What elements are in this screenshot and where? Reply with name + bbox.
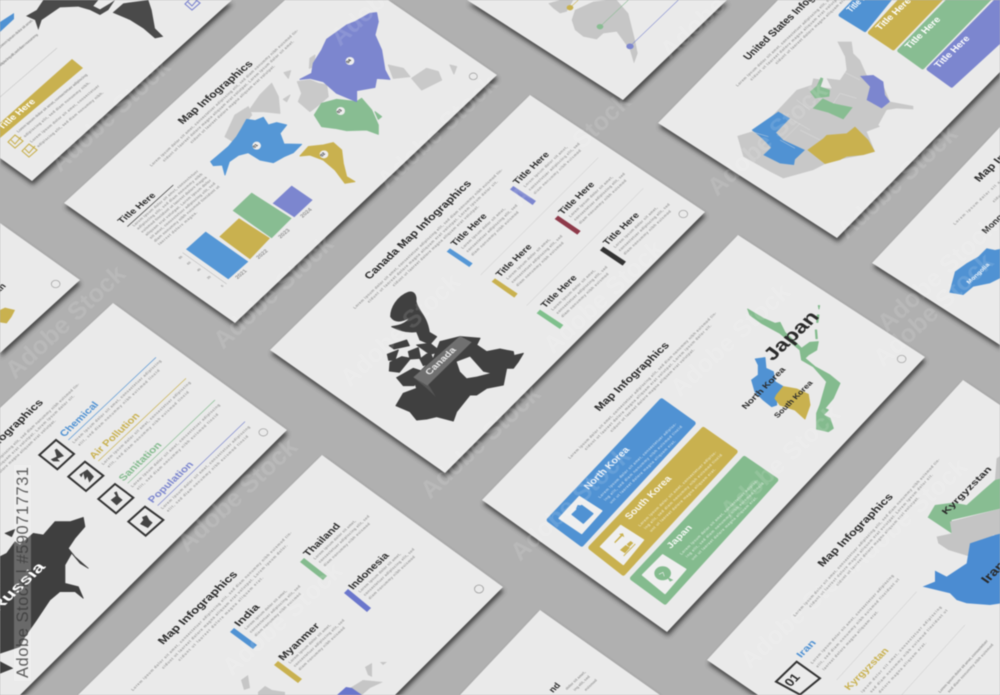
item: Indonesia: Indonesia (346, 551, 392, 592)
bar chart: 2023 (277, 228, 292, 240)
item: blue: consectetuer adipiscing elit, sed (465, 203, 519, 253)
card: yellow (870, 0, 945, 48)
map: Mongolia: Mongolia (966, 262, 992, 285)
item: Population: Lorem ipsum dolor sit amet, consectetuer adipiscing (160, 425, 252, 510)
watermarks: Adobe Stock (868, 248, 999, 372)
subtitle text: cidunt ut laoreet dolore magna aliquam erat volutpat. (392, 205, 480, 287)
icon: factory (68, 462, 103, 491)
panel: Iran and Kyrgyzstan slide (707, 380, 1000, 695)
card: South Korea: ing elit, sed diam nonummy nibh euismod tincid (643, 453, 724, 530)
card: South Korea (591, 429, 735, 573)
title: Canada Map Infographics (362, 178, 475, 282)
item: green: Lorem ipsum dolor sit amet, (550, 269, 596, 311)
subtitle text: cidunt ut laoreet dolore magna aliquam erat volutpat. (189, 65, 276, 144)
text block: sed diam nonummy nibh euismod (947, 643, 995, 693)
item: Iran: Lorem ipsum dolor sit amet, consectetuer adipiscing (810, 574, 895, 665)
card: North Korea: Lorem ipsum dolor sit amet, consectetuer adipisc- (598, 422, 678, 499)
item: Air Pollution: Air Pollution (87, 411, 143, 461)
item: yellow: Title Here (493, 242, 534, 278)
bar chart: 0 (220, 284, 225, 288)
text fragment: euismod (584, 678, 599, 692)
map: USA base (737, 42, 913, 178)
card: blue (841, 0, 893, 30)
markers (567, 5, 634, 49)
item: Myanmar (274, 608, 351, 683)
banner: yellow title (0, 59, 83, 138)
watermarks: Adobe Stock (665, 278, 796, 402)
text fragment: ing elit, sed (573, 675, 592, 692)
icon: lightbulb (654, 566, 673, 582)
stock ID strip: Adobe Stock | #590717731 (14, 467, 32, 678)
item: yellow: Lorem ipsum dolor sit amet, (505, 238, 551, 280)
panel: left small slide (0, 223, 80, 353)
item: green: consectetuer adipiscing elit, sed (555, 265, 609, 315)
map: purple states (860, 75, 890, 108)
map: Russia (0, 517, 88, 673)
map: Japan (748, 306, 840, 432)
item: Sanitation: Sanitation (117, 441, 165, 483)
banner: blue (0, 13, 14, 32)
item: black: diam nonummy nibh euismod (623, 209, 673, 255)
card: South Korea: South Korea (623, 474, 675, 522)
map: Kyrgyzstan (928, 473, 1000, 533)
item: purple: Lorem ipsum dolor sit amet, (523, 146, 569, 188)
watermarks: Adobe Stock (735, 550, 866, 674)
item: Thailand: Thailand (301, 522, 343, 559)
watermarks: Adobe Stock (702, 77, 833, 201)
icon: growth chart (614, 533, 636, 556)
heading: title here: Title Here (115, 191, 158, 225)
text fragment: dolor sit amet, (565, 671, 587, 691)
map fragment (0, 308, 15, 323)
map: green states (810, 77, 853, 119)
item: India (230, 574, 307, 649)
item: India: Lorem ipsum dolor sit amet, (244, 590, 288, 630)
watermarks: Adobe Stock (372, 70, 503, 194)
card: green: Title Here (903, 15, 943, 50)
subtitle text: Lorem ipsum dolor sit amet, consectetuer adipiscing elit, sed diam nonummy nibh euismod tin- (568, 311, 718, 460)
item: Thailand: consectetuer adipiscing elit, sed (318, 514, 371, 564)
watermarks: Adobe Stock (335, 268, 466, 392)
map: gray Africa (548, 0, 638, 63)
item: Myanmar: diam nonummy nibh euismod (298, 626, 347, 671)
text block: aliquam erat volutpat. Lorem ipsum dolor (144, 179, 213, 237)
card: Japan: Lorem ipsum dolor sit amet, consectetuer adipisc- (679, 479, 760, 556)
item: Myanmar: Lorem ipsum dolor sit amet, (288, 624, 332, 664)
icon: page badge (474, 585, 484, 593)
item: yellow (492, 224, 569, 298)
panel: United States slide (658, 0, 1000, 238)
icon: page badge (469, 73, 477, 80)
item: Thailand: diam nonummy nibh euismod (323, 522, 372, 567)
item: India: India (232, 602, 263, 629)
subtitle text: cidunt ut laoreet dolore magna aliquam erat. (176, 576, 264, 662)
map markers: 02 (319, 151, 327, 158)
bar chart: 2021 (234, 269, 249, 280)
subtitle text: Lorem ipsum dolor sit amet, consectetuer adipiscing elit, sed diam nonummy nibh euismod tin- (149, 28, 300, 167)
map: blue states (752, 112, 805, 165)
text block: Lorem ipsum dolor sit amet, consectetuer adipiscing (16, 73, 89, 133)
map markers: 03 (335, 108, 343, 114)
item: Thailand (300, 504, 376, 580)
bar chart: 2024 (299, 207, 314, 219)
map: South Korea (775, 387, 810, 419)
leader lines (570, 0, 678, 46)
text block: diam nonummy nibh euismod tincidunt ut (153, 185, 221, 243)
map markers: 04 (345, 58, 353, 64)
icon: page badge (259, 429, 268, 436)
map: yellow states (807, 127, 875, 164)
card: green (899, 0, 993, 67)
watermarks: Adobe Stock (715, 400, 846, 524)
subtitle text: Lorem ipsum dolor sit amet, consectetuer adipiscing elit, sed diam nonummy nibh euismod tin- (130, 530, 293, 692)
text block: euismod tincidunt ut laoreet dolore magna (140, 175, 209, 233)
map: North Korea (752, 358, 783, 407)
card: North Korea: ing elit, sed diam nonummy nibh euismod tincid (603, 425, 684, 502)
icon: sanitizer (98, 484, 133, 513)
subtitle text: cidunt ut laoreet dolore magna aliquam erat volutpat. Lorem ipsum dolor sit amet. (162, 40, 295, 162)
item: blue: Title Here (448, 212, 489, 248)
subtitle text: cidunt ut laoreet dolore magna aliquam erat volutpat. Lorem ipsum dolor sit. (367, 180, 499, 303)
item: purple: diam nonummy nibh euismod (533, 149, 583, 195)
map: Mongolia (949, 248, 1000, 295)
watermarks: Adobe Stock (872, 213, 1000, 337)
text block: adipiscing elit, sed diam nonummy nibh. (36, 91, 105, 148)
map label: Canada banner (413, 336, 472, 397)
subtitle text (0, 382, 90, 530)
icon: page badge (897, 355, 906, 363)
map: North America (211, 117, 302, 175)
panel: Mongolia slide (872, 84, 1000, 345)
item: blue (447, 193, 524, 267)
map label: Japan: Japan (760, 308, 824, 365)
icon: page badge (679, 210, 688, 218)
heading fragment: nd (546, 681, 563, 694)
text fragment (565, 671, 599, 692)
panel: Canada map slide (270, 95, 705, 473)
panel: world map slide (64, 0, 497, 323)
map: dark Americas (26, 0, 163, 38)
item: Myanmar: Myanmer (276, 621, 323, 663)
watermarks: Adobe Stock (842, 453, 973, 577)
panel: bottom centre slide (460, 610, 660, 695)
number badge: 01: 01 (782, 671, 803, 689)
item: Myanmar: consectetuer adipiscing elit, sed (293, 618, 346, 668)
watermarks: Adobe Stock (208, 230, 339, 354)
item: Iran: laoreet dolore magna aliquam erat. (822, 610, 879, 671)
item: Iran (794, 574, 906, 672)
item: yellow: diam nonummy nibh euismod (515, 241, 565, 287)
map: Eurasia (300, 13, 390, 102)
icon: flask (39, 440, 74, 469)
subtitle text: cidunt ut laoreet dolore magna aliquam erat volutpat. Lorem ipsum dolor sit. (584, 324, 712, 451)
bar chart: 80 (178, 255, 184, 260)
item: Sanitation: elit, sed diam nonummy nibh euismod tincid (136, 413, 220, 491)
subtitle text: cidunt ut laoreet dolore magna aliquam erat volutpat. Lorem ipsum dolor. (160, 543, 289, 670)
watermarks: Adobe Stock (832, 120, 963, 244)
card: North Korea: North Korea (582, 445, 633, 492)
title: Map Infographics (156, 569, 241, 647)
divider (0, 48, 57, 97)
text block (132, 169, 226, 246)
item: black: consectetuer adipiscing elit, sed (618, 202, 671, 252)
item: Indonesia: consectetuer adipiscing elit, sed (363, 547, 416, 597)
card: purple (929, 0, 1000, 86)
item: Kyrgyzstan: Kyrgyzstan (842, 646, 892, 692)
item: black: Title Here (601, 211, 641, 247)
subtitle text: Lorem ipsum dolor sit amet, consectetuer adipiscing elit, sed diam nonummy nibh euismod tin- (353, 168, 504, 310)
bar chart: 2022 (255, 249, 270, 260)
item: purple: consectetuer adipiscing elit, sed (528, 142, 581, 191)
item: India: consectetuer adipiscing elit, sed (249, 584, 302, 634)
text block: Lorem ipsum dolor sit amet, consectetuer (29, 84, 101, 143)
subtitle text (735, 0, 896, 93)
item: blue: Lorem ipsum dolor sit amet, (460, 207, 506, 250)
item: Air Pollution: Lorem ipsum dolor sit amet, consectetuer adipiscing (101, 381, 192, 466)
watermarks: Adobe Stock (505, 88, 636, 212)
watermarks: Adobe Stock (538, 235, 669, 359)
map: Africa (314, 98, 382, 134)
text block: adipiscing elit, sed diam nonummy nibh. (23, 81, 91, 138)
heading: title here (115, 185, 173, 227)
text block: Lorem ipsum dolor sit amet, consectetuer (132, 169, 200, 227)
card: North Korea (549, 401, 693, 544)
item: Indonesia: diam nonummy nibh euismod (368, 555, 417, 600)
card: Japan: ing elit, sed diam nonummy nibh euismod tincid (685, 481, 765, 558)
card: purple: Title Here (932, 34, 972, 69)
map: South America (300, 143, 355, 183)
card: Japan: Japan (664, 523, 694, 550)
title: Map Infographics (175, 59, 256, 126)
item: black: Lorem ipsum dolor sit amet, (613, 206, 659, 249)
icon: purple check (185, 0, 200, 10)
panel: top-left checklist slide (0, 0, 232, 181)
map markers (251, 57, 354, 158)
item: Indonesia: Lorem ipsum dolor sit amet, (358, 553, 402, 593)
text block: Lorem ipsum dolor sit amet, consectetuer (938, 639, 989, 694)
item: Population: elit, sed diam nonummy nibh euismod tincid (166, 435, 250, 513)
map: gray neighbours (937, 455, 1000, 557)
icon: people (128, 507, 163, 536)
number badge: 01 (776, 662, 820, 695)
icon: yellow check 1 (8, 135, 23, 148)
item: maroon: diam nonummy nibh euismod (578, 179, 628, 225)
text block: sit amet, consectetuer adipiscing elit, sed (149, 182, 217, 240)
bar chart (178, 186, 314, 288)
item: maroon (555, 161, 632, 235)
item: Air Pollution: elit, sed diam nonummy nibh euismod tincid (107, 390, 191, 468)
item: yellow: consectetuer adipiscing elit, sed (510, 234, 564, 284)
text block (0, 19, 105, 148)
item: Population: Population (146, 460, 196, 505)
title: Map Infographics (592, 340, 672, 413)
item: maroon: consectetuer adipiscing elit, sed (573, 172, 627, 221)
item: blue: diam nonummy nibh euismod (470, 210, 520, 256)
bar chart: 60 (186, 261, 192, 266)
watermarks: Adobe Stock (505, 442, 636, 566)
text block: adipiscing elit, sed diam nonummy nibh (136, 172, 204, 230)
map label: Canada banner: Canada (423, 345, 459, 377)
item: Sanitation: Lorem ipsum dolor sit amet, consectetuer adipiscing (130, 403, 222, 488)
item: Thailand: Lorem ipsum dolor sit amet, (313, 520, 357, 560)
item: India: diam nonummy nibh euismod (254, 592, 303, 637)
map: partial Southeast Asia (241, 662, 387, 695)
card: Japan: unt ut laoreet dolore magna aliquam erat. (690, 496, 759, 561)
item: maroon: Lorem ipsum dolor sit amet, (568, 176, 614, 218)
panel: India and neighbours slide (78, 455, 503, 695)
map markers: 01 (251, 142, 259, 149)
item: green: diam nonummy nibh euismod (560, 272, 610, 318)
card: South Korea: unt ut laoreet dolore magna aliquam erat. (649, 468, 717, 533)
panel: Russia pollution slide (0, 303, 287, 695)
watermarks: Adobe Stock (172, 433, 303, 557)
icon: yellow check 2 (22, 144, 37, 157)
item: Iran: Iran (794, 638, 819, 660)
item: maroon: Title Here (556, 180, 597, 216)
title: Map Infographics (815, 492, 896, 569)
map label: North Korea: North Korea (739, 365, 788, 411)
item: Chemical: Chemical (58, 400, 102, 439)
item: green (537, 255, 614, 329)
map: Iran (923, 533, 1000, 605)
item: Iran: elit, sed diam nonummy nibh euismod tincidunt ut (815, 577, 901, 668)
card: North Korea: unt ut laoreet dolore magna aliquam erat. (609, 440, 677, 504)
item: Kyrgyzstan: sed diam nonummy nibh euismod tincidunt ut (869, 608, 949, 693)
panel: Japan map slide (482, 235, 925, 632)
card: Japan (632, 458, 776, 602)
item: Kyrgyzstan: dolore magna aliquam erat. (878, 641, 927, 694)
subtitle text: Lorem ipsum dolor sit amet, consectetuer adipiscing elit, sed diam nonummy nibh euismod tin- (793, 458, 941, 617)
card: South Korea: Lorem ipsum dolor sit amet, consectetuer adipisc- (638, 450, 718, 527)
item: Chemical: elit, sed diam nonummy nibh euismod tincid (77, 369, 161, 447)
icon: page badge (51, 280, 60, 288)
subtitle text: cidunt ut laoreet dolore magna aliquam erat volutpat. Lorem ipsum dolor sit. (808, 473, 934, 608)
watermarks: Adobe Stock (217, 557, 348, 681)
item: Indonesia (344, 537, 421, 612)
bar chart: 40 (196, 267, 202, 272)
subtitle text: cidunt ut laoreet dolore magna aliquam erat volutpat. (835, 496, 920, 587)
map label: Kyrgyzstan: Kyrgyzstan (939, 465, 994, 516)
watermarks: Adobe Stock (0, 260, 131, 384)
item: Chemical: Lorem ipsum dolor sit amet, consectetuer adipiscing (72, 359, 163, 444)
map: Canada (387, 292, 523, 421)
subtitle text: cidunt ut laoreet dolore magna aliquam erat volutpat. (609, 348, 696, 433)
panel: top centre slide (467, 0, 727, 100)
item: purple: Title Here (511, 150, 551, 186)
item: purple (510, 131, 586, 205)
watermarks: Adobe Stock (415, 380, 546, 504)
item: green: Title Here (538, 273, 579, 309)
bar chart: 20 (206, 275, 212, 280)
map: gray regions (225, 55, 457, 142)
watermarks: Adobe Stock (45, 53, 176, 177)
item: black (600, 192, 676, 266)
text block: laoreet dolore magna. (157, 211, 198, 246)
item: Kyrgyzstan: ipsum dolor sit amet, consectetuer adipiscing (860, 605, 943, 694)
subtitle text (953, 84, 1000, 232)
icon: briefcase (572, 505, 593, 523)
map label: South Korea: South Korea (772, 379, 815, 419)
